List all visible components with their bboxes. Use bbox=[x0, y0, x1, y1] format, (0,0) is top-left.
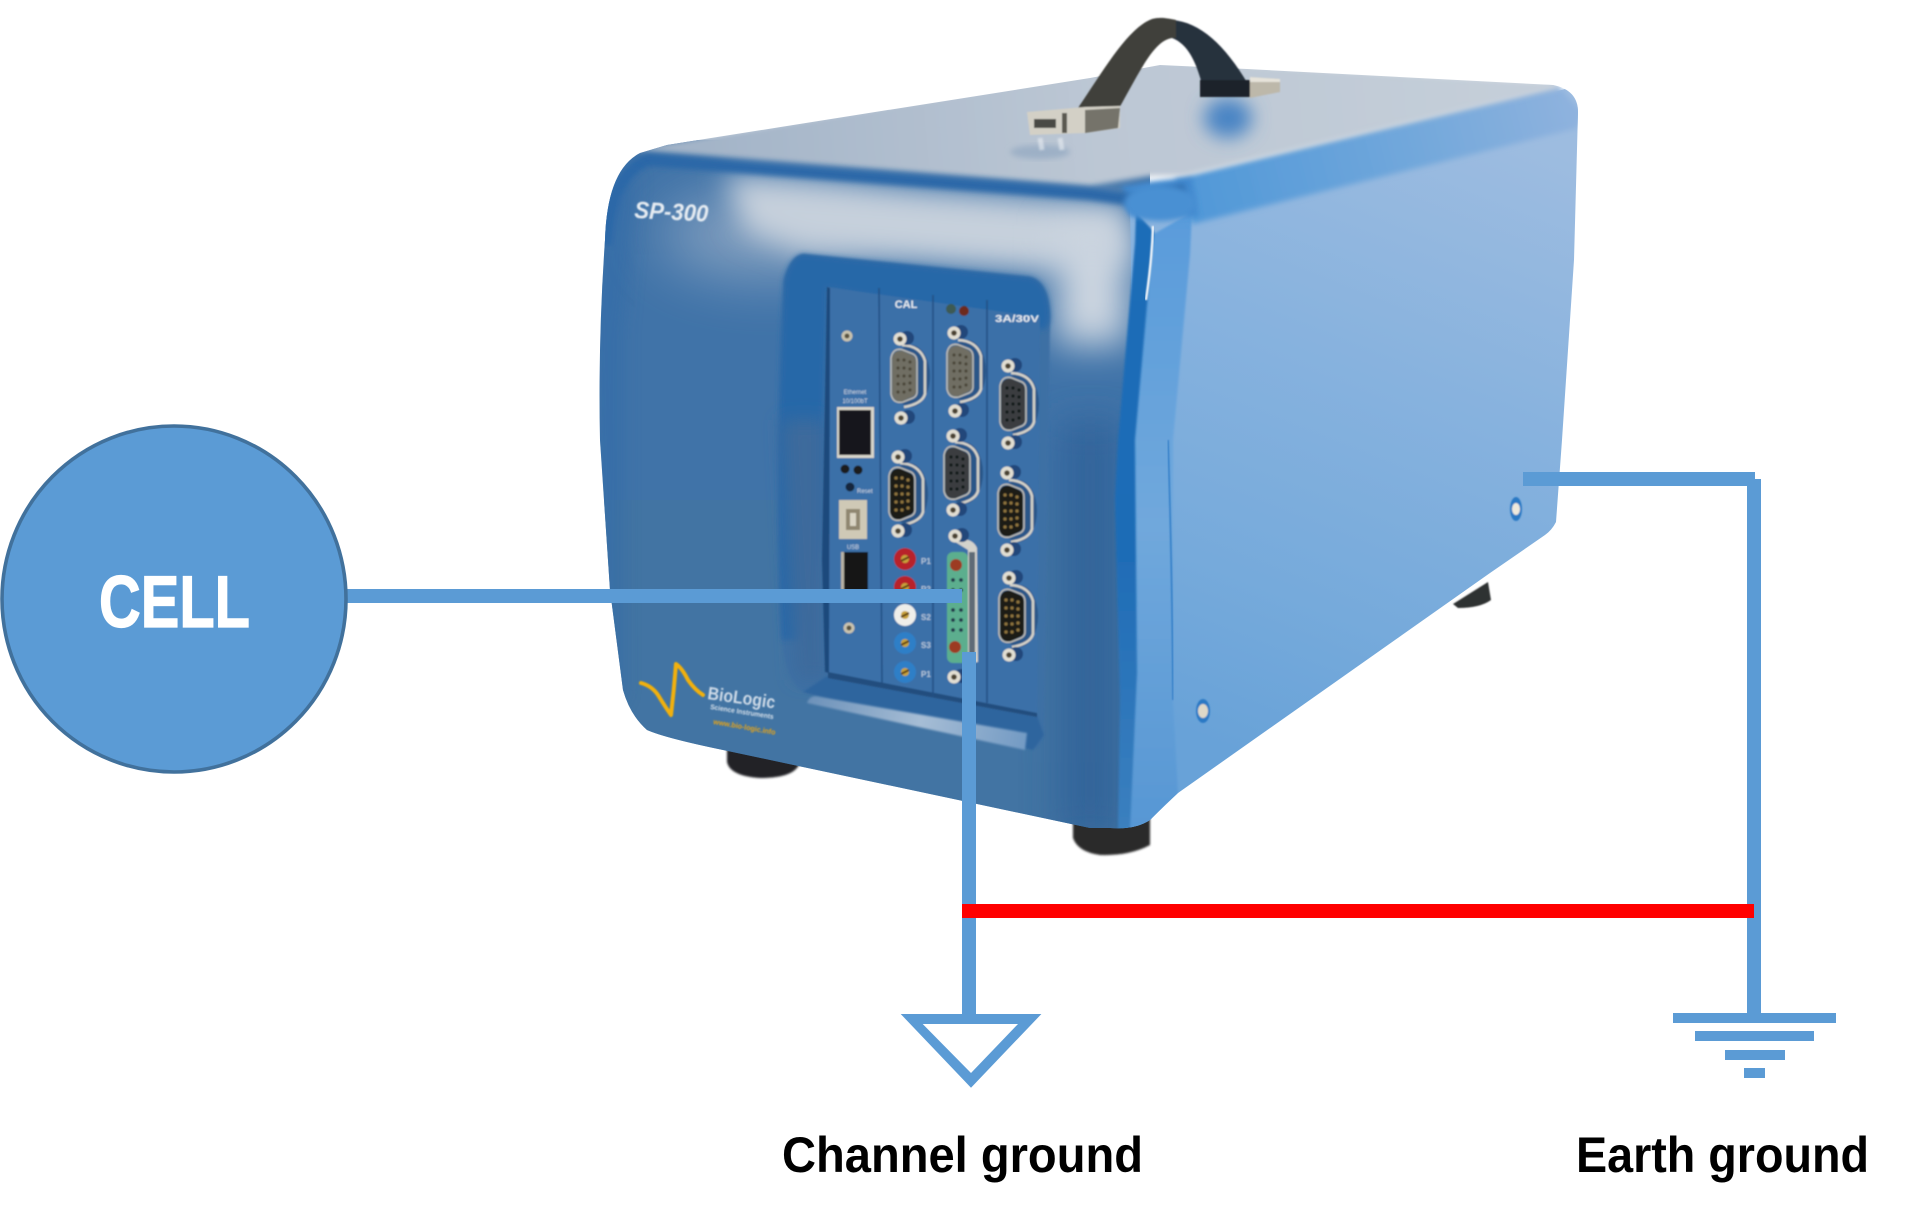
label: 3A/30V: 3A/30V bbox=[995, 313, 1039, 325]
recess lower edge shadow bbox=[803, 676, 1044, 750]
cell circle bbox=[2, 426, 346, 772]
strap dark inner part bbox=[1172, 20, 1248, 84]
USB port bbox=[839, 500, 867, 539]
logo wave bbox=[641, 664, 703, 715]
highlight on edge bbox=[1146, 226, 1153, 300]
side seam bbox=[1168, 440, 1173, 700]
recess around modules bbox=[778, 254, 1050, 750]
bright blue strip on front edge bbox=[1115, 212, 1154, 830]
front face darkening near edge bbox=[1058, 420, 1122, 840]
foot: front centre bbox=[1073, 816, 1150, 855]
front top edge band bbox=[606, 160, 1185, 245]
wire: earth ground vertical bbox=[1747, 479, 1761, 1014]
instrument body bbox=[590, 60, 1582, 840]
wire: channel ground vertical bbox=[962, 652, 976, 1016]
front face highlight bbox=[660, 195, 880, 275]
jack labels: S3 bbox=[921, 641, 931, 650]
strap outer part bbox=[1078, 18, 1176, 110]
side face bbox=[1122, 85, 1580, 835]
BioLogic logo bbox=[641, 664, 777, 737]
foot: front left bbox=[727, 745, 800, 778]
recess bottom ledge bbox=[807, 696, 1027, 750]
label: USB: USB bbox=[847, 545, 859, 551]
red link between grounds bbox=[962, 904, 1754, 918]
cell label: CELL bbox=[99, 562, 250, 643]
product name: SP-300 bbox=[634, 197, 710, 228]
earth ground symbol bbox=[1673, 1013, 1836, 1078]
logo name: BioLogic bbox=[706, 683, 777, 712]
ethernet port bbox=[837, 407, 874, 458]
top surface bbox=[632, 60, 1560, 186]
device: SP-300 instrument bbox=[590, 18, 1582, 855]
channel ground label: Channel ground bbox=[782, 1127, 1143, 1183]
left bracket bbox=[1027, 106, 1120, 135]
jack labels bbox=[921, 557, 931, 679]
label: ethernet speed: 10/100bT bbox=[842, 399, 868, 405]
corner ridge fill bbox=[1122, 176, 1198, 216]
jack labels: P1 bbox=[921, 557, 931, 566]
jack labels: S2 bbox=[921, 613, 931, 622]
right bracket bbox=[1200, 77, 1280, 98]
status LEDs bbox=[946, 304, 969, 316]
channel ground symbol bbox=[901, 1014, 1041, 1088]
rounded corner where faces meet bbox=[1124, 185, 1196, 221]
jack labels: P2 bbox=[921, 585, 931, 594]
front face base bbox=[590, 140, 1150, 840]
side screws bbox=[1196, 497, 1522, 723]
jack labels: P1 bbox=[921, 670, 931, 679]
module panel bbox=[822, 287, 1040, 717]
LEDs and reset bbox=[840, 464, 862, 492]
corner band between front and side bbox=[1128, 212, 1192, 830]
panel screws bbox=[842, 330, 854, 634]
label: reset: Reset bbox=[857, 489, 873, 495]
left edge tone bbox=[600, 186, 627, 689]
earth ground label: Earth ground bbox=[1576, 1127, 1869, 1183]
foot: back right bbox=[1453, 582, 1491, 608]
top rail bbox=[1175, 84, 1582, 224]
wire: cell to channel bbox=[343, 589, 962, 603]
D-sub connectors bbox=[889, 325, 1039, 662]
handle bbox=[1027, 18, 1280, 135]
label: CAL: CAL bbox=[895, 299, 918, 311]
logo tagline: Science Instruments bbox=[710, 704, 774, 721]
label: ethernet: Ethernet bbox=[844, 390, 867, 396]
module dividers bbox=[879, 288, 987, 703]
green terminal connector bbox=[947, 528, 978, 684]
banana jacks bbox=[894, 548, 916, 683]
logo url: www.bio-logic.info bbox=[712, 717, 777, 737]
wire: chassis to earth horizontal bbox=[1523, 472, 1755, 486]
second network port bbox=[841, 552, 868, 600]
